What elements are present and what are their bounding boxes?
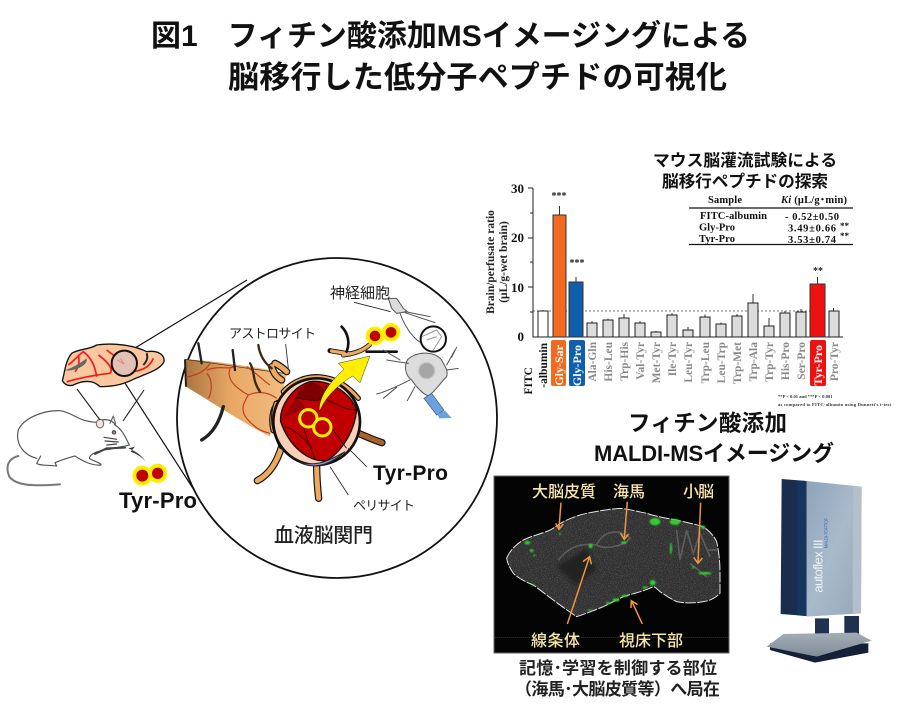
significance marks: *** — [552, 191, 566, 202]
table: Ki values: Gly-Pro — [699, 222, 735, 234]
region labels: 小脳 — [683, 483, 714, 501]
panel: MS imaging brain section — [493, 476, 729, 653]
title: 脳移行した低分子ペプチドの可視化 — [228, 60, 727, 95]
x axis labels: Val-Tyr — [635, 342, 647, 380]
caption: localization — [515, 658, 720, 699]
heading: brain perfusion test: 脳移行ペプチドの探索 — [662, 171, 828, 191]
icon: autoflex III instrument: MALDI-TOF/TOF — [823, 518, 828, 548]
significance marks: ** — [813, 266, 823, 277]
neuron — [377, 298, 458, 401]
y axis title — [485, 210, 510, 314]
y axis labels: 20 — [511, 230, 524, 245]
x axis labels — [523, 341, 841, 394]
heading: MALDI-MS imaging: MALDI-MSイメージング — [594, 441, 834, 466]
table: Ki values: 3.49±0.66 — [788, 224, 836, 234]
caption: localization: 記憶･学習を制御する部位 — [519, 658, 717, 678]
arrows: region pointers — [556, 502, 702, 624]
x axis labels: Trp-Met — [732, 342, 744, 384]
table: Ki values: FITC-albumin — [700, 211, 767, 222]
brain section image — [493, 502, 729, 638]
x axis labels: Pro-Tyr — [829, 342, 841, 381]
y axis labels: 10 — [511, 280, 524, 295]
region labels: 線条体 — [531, 632, 580, 650]
bar chart — [485, 181, 843, 394]
arrow: intake to rat — [128, 447, 148, 465]
region labels: 視床下部 — [619, 632, 683, 650]
leader lines — [286, 302, 391, 495]
table: Ki values: ** — [840, 231, 850, 241]
significance marks: *** — [570, 258, 584, 269]
connector lines: rat to brain — [77, 389, 144, 421]
bars — [538, 311, 548, 337]
label: Tyr-Pro vessel: Tyr-Pro — [373, 462, 448, 485]
x axis labels: -albumin — [538, 342, 550, 388]
table: Ki values: Sample — [708, 195, 742, 206]
footnote — [778, 394, 891, 407]
label: pericyte: ペリサイト — [353, 498, 415, 513]
heading: brain perfusion test: マウス脳灌流試験による — [653, 151, 837, 170]
footnote: **P < 0.01 and ***P < 0.001 — [778, 394, 833, 399]
table: Ki values: - 0.52±0.50 — [785, 212, 839, 223]
label: Tyr-Pro left: Tyr-Pro — [119, 488, 197, 513]
highlighted x labels — [551, 340, 826, 386]
x axis labels: Tyr-Pro — [811, 345, 825, 385]
x axis labels: Ala-Gln — [587, 341, 599, 382]
region labels: 海馬 — [613, 483, 645, 501]
x axis labels: Trp-Ala — [748, 342, 760, 381]
y axis labels: 30 — [511, 181, 524, 196]
error bars — [543, 206, 834, 332]
astrocyte end-feet — [257, 327, 397, 498]
icon: rat — [7, 411, 129, 485]
title: 図1 フィチン酸添加MSイメージングによる — [151, 20, 750, 53]
footnote: as compared to FITC-albumin using Dunnett's t-test — [778, 402, 891, 407]
arrow: transport across barrier — [319, 356, 370, 412]
x axis labels: Met-Tyr — [651, 342, 663, 383]
x axis labels: His-Leu — [603, 341, 615, 382]
icon: rat brain — [62, 344, 164, 387]
table: Ki values: 3.53±0.74 — [788, 235, 837, 246]
caption: localization: （海馬･大脳皮質等）へ局在 — [515, 679, 720, 699]
label: neuron: 神経細胞 — [330, 285, 390, 302]
icon: dipeptide inside vessel — [300, 410, 331, 436]
icon: Tyr-Pro dipeptide (rat) — [134, 466, 165, 484]
x axis labels: Ile-Tyr — [667, 342, 679, 376]
heading: brain perfusion test — [653, 151, 837, 191]
table: Ki values — [689, 195, 853, 246]
y axis title: (μL/g-wet brain) — [498, 221, 510, 303]
vessel cross-section — [273, 378, 360, 465]
table: Ki values: ** — [840, 221, 850, 231]
x axis labels: Trp-Leu — [700, 341, 712, 383]
x axis labels: Leu-Tyr — [683, 342, 695, 383]
connector lines from brain to magnified circle — [123, 280, 247, 507]
significance marks — [552, 191, 823, 277]
y axis labels — [511, 181, 524, 344]
label: astrocyte: アストロサイト — [229, 326, 316, 341]
x axis labels: Ser-Pro — [796, 342, 808, 380]
x axis labels: Gly-Pro — [570, 345, 584, 386]
region labels: 大脳皮質 — [532, 483, 596, 501]
title — [151, 20, 750, 95]
x axis labels: Trp-His — [619, 341, 631, 381]
label: blood-brain barrier: 血液脳関門 — [274, 524, 373, 547]
x axis labels: Leu-Trp — [716, 342, 728, 383]
icon: autoflex III instrument — [767, 479, 872, 663]
icon: dipeptide in brain — [368, 325, 398, 343]
y axis labels: 0 — [518, 329, 524, 344]
y axis title: Brain/perfusate ratio — [485, 210, 497, 314]
x axis labels: His-Pro — [780, 342, 792, 380]
x axis labels: FITC — [523, 367, 535, 394]
icon: neuron and vessel illustration — [185, 298, 458, 498]
table: Ki values: Tyr-Pro — [699, 234, 735, 245]
heading: MALDI-MS imaging — [594, 411, 834, 466]
icon: autoflex III instrument: autoflex III — [810, 539, 825, 593]
heading: MALDI-MS imaging: フィチン酸添加 — [628, 411, 787, 436]
x axis labels: Trp-Tyr — [764, 342, 776, 382]
region labels — [531, 483, 714, 650]
x axis labels: Gly-Sar — [552, 344, 566, 386]
panel: blood-brain barrier magnified circle — [177, 258, 497, 578]
table: Ki values: Ki (μL/g･min) — [780, 195, 848, 206]
